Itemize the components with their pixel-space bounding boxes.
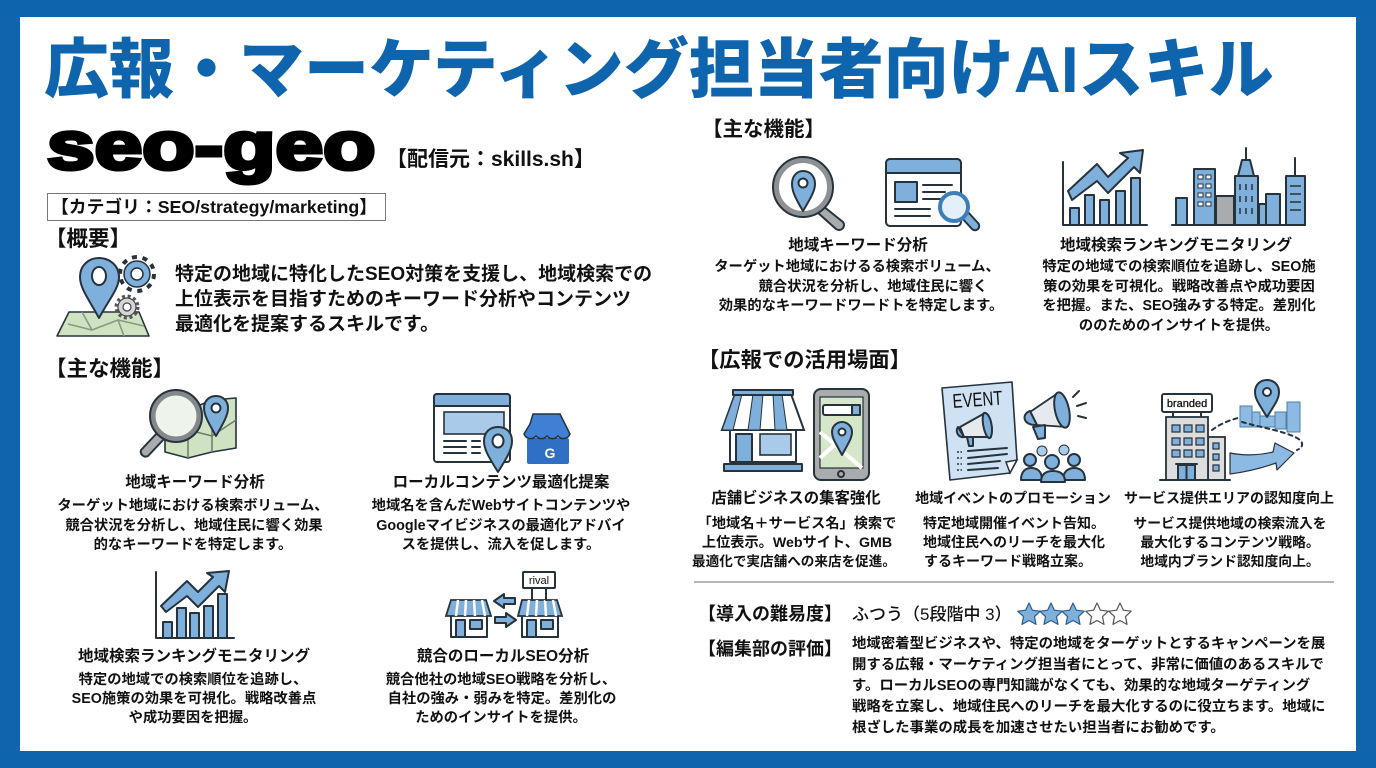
feature description bbox=[72, 670, 316, 726]
panel: difficulty bbox=[698, 603, 1131, 624]
icon: magnifier with pin and browser bbox=[773, 157, 979, 230]
feature description: や成功要因を把握。 bbox=[129, 708, 257, 726]
feature title: 地域キーワード分析 bbox=[788, 235, 928, 254]
review text bbox=[852, 634, 1325, 736]
panel: PR use cases bbox=[692, 348, 1334, 569]
icon: map pin with gears bbox=[57, 257, 154, 336]
icon: branded building with arrow to city bbox=[1160, 380, 1302, 480]
feature description bbox=[57, 496, 329, 553]
feature: keyword analysis right bbox=[714, 157, 1003, 314]
panel: editorial review bbox=[698, 634, 1325, 736]
icon: rising bar chart bbox=[156, 571, 234, 638]
feature description: スを提供し、流入を促します。 bbox=[402, 535, 600, 553]
icon: browser, pin and store bbox=[434, 394, 570, 472]
use case: store business bbox=[692, 389, 896, 569]
feature description: 効果的なキーワードワードトを特定します。 bbox=[719, 296, 1003, 314]
use case description: 地域住民へのリーチを最大化 bbox=[923, 534, 1105, 550]
panel: main features left bbox=[45, 357, 630, 726]
overview text: 特定の地域に特化したSEO対策を支援し、地域検索での bbox=[175, 263, 652, 285]
review text: 開する広報・マーケティング担当者にとって、非常に価値のあるスキルで bbox=[852, 655, 1324, 673]
feature description: 地域名を含んだWebサイトコンテンツや bbox=[372, 496, 630, 514]
icon: event flyer, megaphone and crowd bbox=[942, 382, 1086, 482]
feature description: 競合状況を分析し、地域住民に響く効果 bbox=[65, 516, 323, 534]
feature description: 競合状況を分析し、地域住民に響く bbox=[759, 277, 987, 295]
source label: 【配信元：skills.sh】 bbox=[386, 148, 595, 171]
use case description: するキーワード戦略立案。 bbox=[924, 553, 1092, 569]
icon: chart and cityscape bbox=[1063, 148, 1305, 225]
feature description: ターゲット地域における検索ボリューム、 bbox=[57, 496, 329, 514]
feature description: Googleマイビジネスの最適化アドバイ bbox=[376, 516, 626, 534]
use case description bbox=[1133, 515, 1327, 569]
overview text: 最適化を提案するスキルです。 bbox=[175, 313, 439, 335]
icon: event flyer, megaphone and crowd: EVENT bbox=[952, 388, 1003, 413]
use case description: 特定地域開催イベント告知。 bbox=[923, 515, 1105, 531]
heading: overview: 【概要】 bbox=[45, 227, 131, 251]
use case: service area bbox=[1124, 380, 1334, 569]
review label: 【編集部の評価】 bbox=[698, 639, 842, 659]
icon: magnifier over map bbox=[141, 390, 236, 458]
use case description bbox=[692, 515, 896, 569]
heading: PR use cases: 【広報での活用場面】 bbox=[698, 348, 911, 372]
review text: 地域密着型ビジネスや、特定の地域をターゲットとするキャンペーンを展 bbox=[852, 634, 1325, 652]
heading: main features right: 【主な機能】 bbox=[702, 118, 825, 141]
feature description: ためのインサイトを提供。 bbox=[415, 709, 587, 726]
feature: competitor local SEO bbox=[386, 572, 616, 726]
icon: two stores with arrows bbox=[446, 572, 562, 637]
feature description bbox=[386, 670, 616, 726]
icon: branded building with arrow to city: branded bbox=[1167, 398, 1207, 410]
use case description: 最大化するコンテンツ戦略。 bbox=[1140, 534, 1320, 550]
feature description: 策の効果を可視化。戦略改善点や成功要因 bbox=[1043, 277, 1315, 295]
use case description: 地域内ブランド認知度向上。 bbox=[1140, 553, 1320, 569]
use case description: 最適化で実店舗への来店を促進。 bbox=[692, 553, 896, 569]
use case description bbox=[923, 515, 1105, 569]
icon: star rating 3 of 5 bbox=[1018, 603, 1131, 624]
overview text bbox=[175, 263, 652, 335]
use case title: 地域イベントのプロモーション bbox=[915, 490, 1111, 506]
panel: overview bbox=[45, 227, 652, 336]
title: 広報・マーケティング担当者向けAIスキル bbox=[44, 33, 1274, 106]
difficulty value: ふつう（5段階中 3） bbox=[852, 605, 1012, 624]
feature description bbox=[714, 257, 1003, 314]
use case description: 上位表示。Webサイト、GMB bbox=[702, 534, 892, 551]
icon: browser, pin and store: G bbox=[545, 445, 556, 461]
feature description: 的なキーワードを特定します。 bbox=[94, 535, 292, 553]
panel: main features right bbox=[702, 118, 1316, 334]
feature title: ローカルコンテンツ最適化提案 bbox=[393, 472, 610, 491]
feature description: を把握。また、SEO強みする特定。差別化 bbox=[1042, 296, 1316, 314]
feature description: 特定の地域での検索順位を追跡し、 bbox=[79, 670, 307, 688]
heading: main features: 【主な機能】 bbox=[45, 357, 174, 381]
feature title: 地域キーワード分析 bbox=[125, 472, 265, 491]
feature description: ののためのインサイトを提供。 bbox=[1079, 317, 1279, 334]
feature title: 地域検索ランキングモニタリング bbox=[78, 646, 311, 665]
feature description: SEO施策の効果を可視化。戦略改善点 bbox=[72, 689, 316, 707]
use case: local event bbox=[915, 382, 1111, 569]
feature description: 特定の地域での検索順位を追跡し、SEO施 bbox=[1042, 257, 1316, 275]
feature: local content optimization bbox=[372, 394, 630, 553]
feature description: 競合他社の地域SEO戦略を分析し、 bbox=[386, 670, 616, 688]
use case title: サービス提供エリアの認知度向上 bbox=[1124, 490, 1334, 506]
icon: store and smartphone map bbox=[722, 389, 869, 480]
icon: two stores with arrows: rival bbox=[529, 575, 549, 587]
use case description: サービス提供地域の検索流入を bbox=[1133, 515, 1327, 531]
skill name: seo-geo bbox=[47, 108, 375, 184]
feature: local keyword analysis bbox=[57, 390, 329, 553]
feature title: 地域検索ランキングモニタリング bbox=[1060, 235, 1293, 254]
use case description: 「地域名＋サービス名」検索で bbox=[698, 515, 896, 532]
feature description bbox=[1042, 257, 1316, 334]
use case title: 店舗ビジネスの集客強化 bbox=[711, 488, 881, 507]
feature: ranking monitoring right bbox=[1042, 148, 1316, 334]
feature description: ターゲット地域におけるる検索ボリューム、 bbox=[714, 257, 1000, 275]
review text: 戦略を立案し、地域住民へのリーチを最大化するのに役立ちます。地域に bbox=[852, 697, 1325, 715]
category box: 【カテゴリ：SEO/strategy/marketing】 bbox=[51, 196, 377, 217]
review text: す。ローカルSEOの専門知識がなくても、効果的な地域ターゲティング bbox=[852, 676, 1311, 694]
feature description bbox=[372, 496, 630, 553]
review text: 根ざした事業の成長を加速させたい担当者にお勧めです。 bbox=[852, 718, 1225, 736]
feature title: 競合のローカルSEO分析 bbox=[417, 646, 590, 665]
feature: local ranking monitoring bbox=[72, 571, 316, 726]
overview text: 上位表示を目指すためのキーワード分析やコンテンツ bbox=[175, 288, 631, 310]
difficulty label: 【導入の難易度】 bbox=[698, 604, 842, 624]
feature description: 自社の強み・弱みを特定。差別化の bbox=[388, 689, 616, 707]
